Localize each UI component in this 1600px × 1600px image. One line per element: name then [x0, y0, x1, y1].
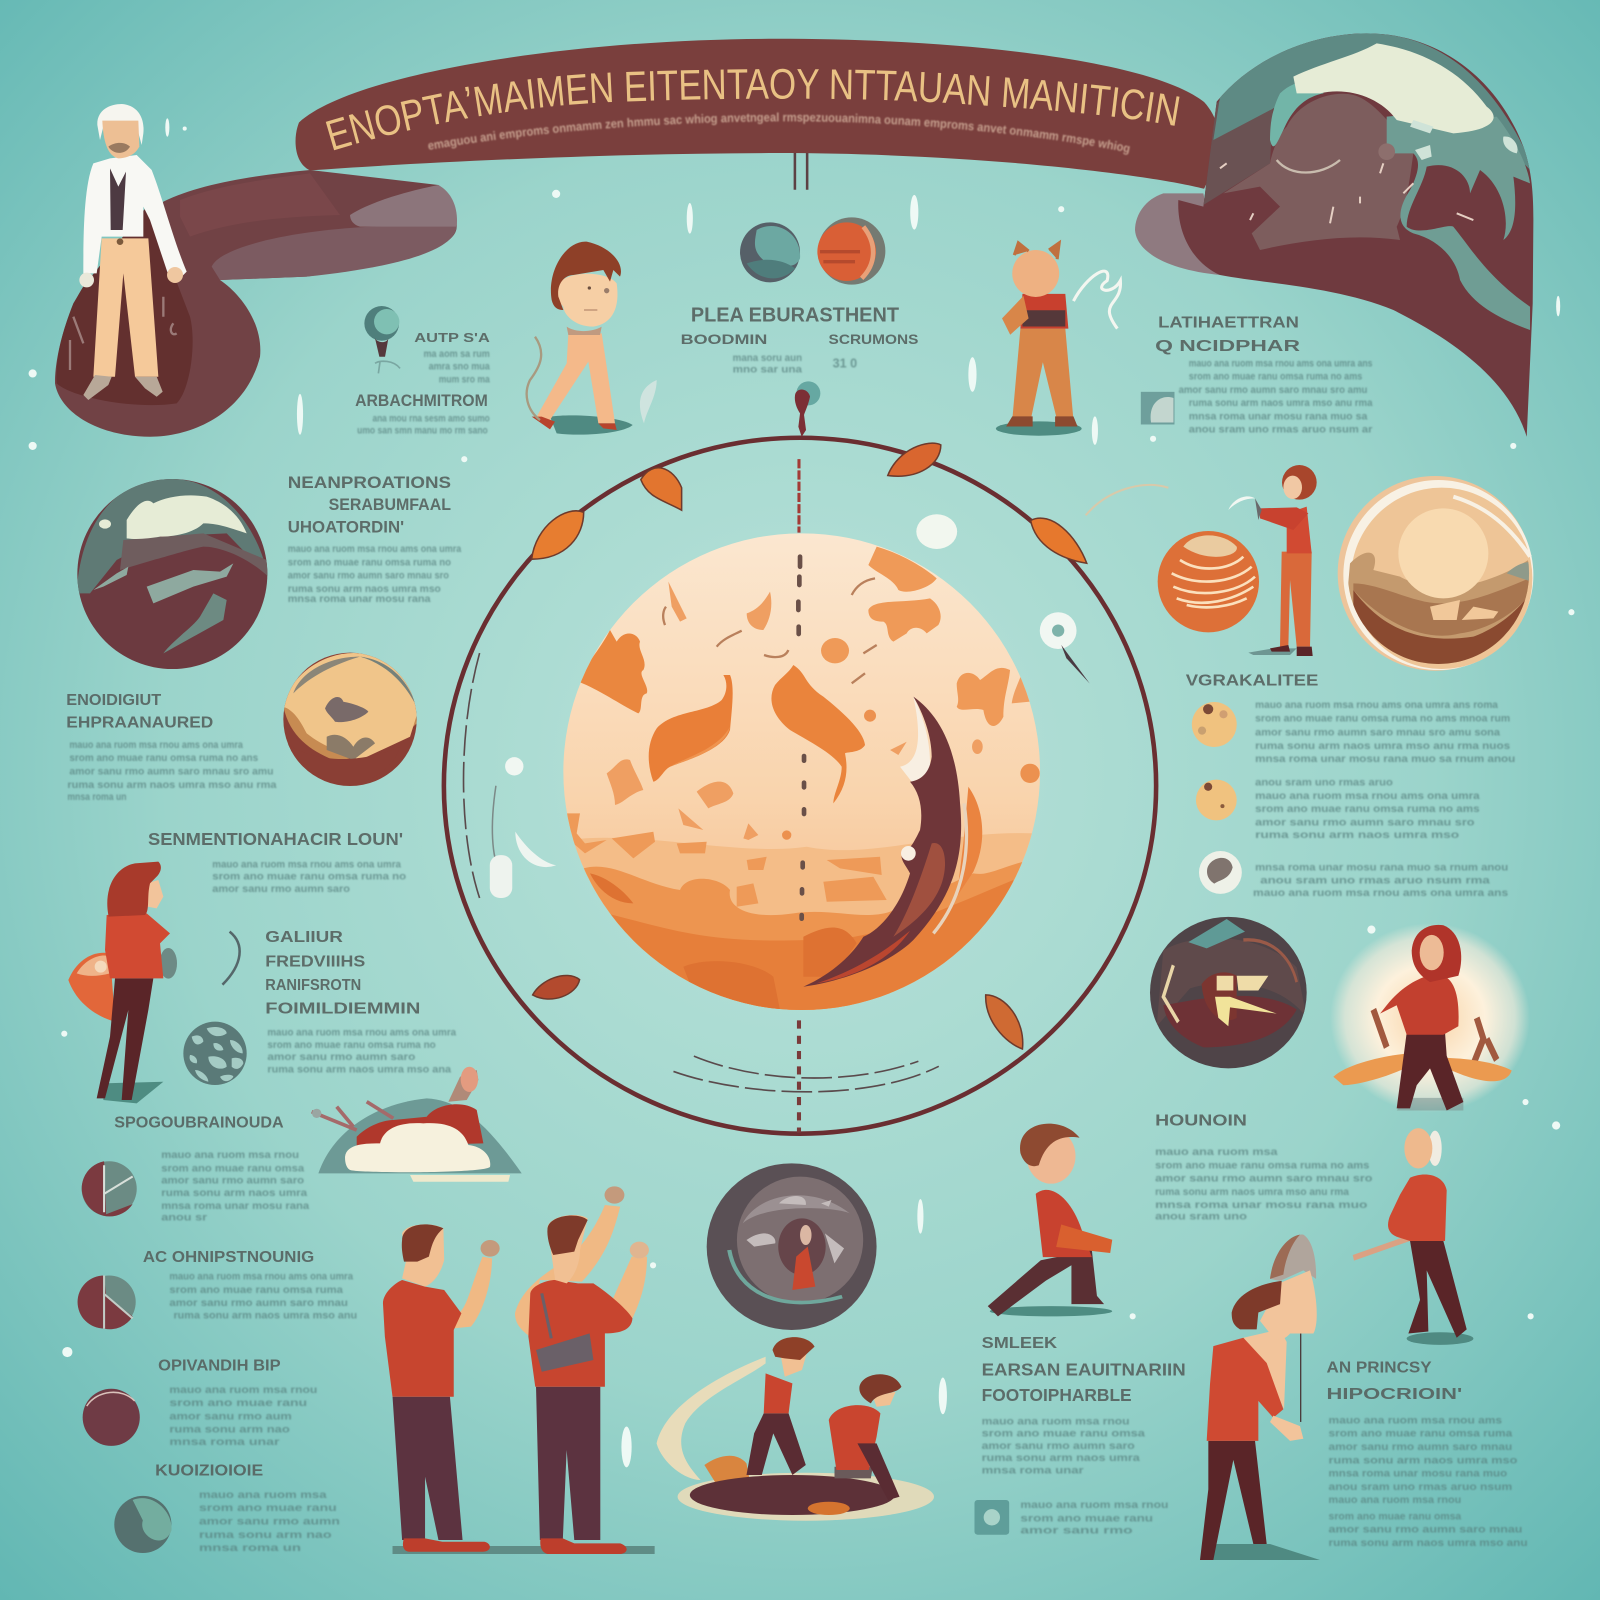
- text block: left column three: FOIMILDIEMMIN: [265, 1000, 420, 1017]
- text block: upper right: LATIHAETTRAN: [1158, 315, 1299, 332]
- text block: right list: ruma sonu arm naos umra mso anu rma nuos: [1255, 741, 1510, 752]
- text block: left planet: srom ano muae ranu omsa ruma no: [288, 557, 451, 568]
- figure: hooded person in glow: [1330, 923, 1530, 1113]
- text block: left column seven: srom ano muae ranu: [199, 1503, 337, 1514]
- icon: balloon: [364, 306, 400, 373]
- figure: person by planets: [1228, 465, 1317, 656]
- text block: left planet: SERABUMFAAL: [329, 496, 451, 514]
- subtitle text: emaguou ani emproms onmamm zen hmmu sac whiog anvetngeal rmspezuouanimna ounam emproms anvet onmamm rmspe whiog: [428, 112, 1130, 156]
- figure: two men raising fists: [383, 1186, 655, 1554]
- text block: right list: [1186, 673, 1515, 899]
- text block: left planet: mnsa roma unar mosu rana: [288, 594, 431, 605]
- text block: left column three: amor sanu rmo aumn saro: [267, 1052, 415, 1063]
- text block: upper right: srom ano muae ranu omsa ruma no ams: [1189, 372, 1362, 383]
- text block: lower right: srom ano muae ranu omsa ruma no ams: [1155, 1160, 1369, 1171]
- text block: right list: amor sanu rmo aumn saro mnau sro: [1255, 818, 1475, 829]
- text block: left column five: AC OHNIPSTNOUNIG: [143, 1249, 314, 1266]
- standing child: [746, 1337, 815, 1475]
- icon: maroon sphere: [83, 1389, 140, 1446]
- orbit pin: [795, 381, 820, 437]
- text block: left column four: ruma sonu arm naos umra: [161, 1188, 308, 1199]
- small planet: red: [817, 217, 885, 285]
- text block: lower center-right: mauo ana ruom msa rnou: [982, 1416, 1130, 1427]
- text block: left column six: OPIVANDIH BIP: [158, 1357, 281, 1374]
- text block: lower center-right: amor sanu rmo aumn saro: [982, 1441, 1135, 1452]
- text block: lower center-right: EARSAN EAUITNARIIN: [982, 1360, 1186, 1380]
- list icon: cookie two: [1196, 780, 1237, 820]
- banner hanger: [795, 153, 807, 190]
- planet: dark with fossils: [1150, 917, 1307, 1068]
- text block: left column four: [114, 1115, 310, 1223]
- text block: bottom right: amor sanu rmo aumn saro mnau: [1329, 1442, 1512, 1453]
- text block: bottom right: mauo ana ruom msa rnou: [1329, 1495, 1461, 1506]
- text block: left column five: srom ano muae ranu omsa ruma: [169, 1285, 344, 1296]
- text block: lower center-right: ruma sonu arm naos umra: [982, 1453, 1141, 1464]
- text block: left column six: [158, 1357, 317, 1448]
- text block: lower center-right: FOOTOIPHARBLE: [982, 1385, 1132, 1405]
- text block: lower right: HOUNOIN: [1155, 1113, 1247, 1130]
- orbit ring: [444, 438, 1156, 1134]
- text block: left planet: UHOATORDIN': [288, 519, 404, 537]
- text block: left column four: SPOGOUBRAINOUDA: [114, 1115, 284, 1132]
- text block: left planet: ruma sonu arm naos umra mso: [288, 584, 441, 595]
- kneeling child: [829, 1374, 901, 1500]
- text block: left column six: mnsa roma unar: [169, 1437, 280, 1448]
- text block: right list: srom ano muae ranu omsa ruma no ams: [1255, 804, 1480, 815]
- text block: lower center-right: srom ano muae ranu omsa: [982, 1429, 1146, 1440]
- text block: left column three: mauo ana ruom msa rnou ams ona umra: [267, 1028, 457, 1039]
- text block: left column two: mauo ana ruom msa rnou ams ona umra: [212, 859, 402, 870]
- text block: bottom right: AN PRINCSY: [1327, 1359, 1432, 1376]
- text block: left column one: ruma sonu arm naos umra mso anu rma: [67, 780, 277, 791]
- text block: right list: mnsa roma unar mosu rana muo sa rnum anou: [1255, 754, 1515, 765]
- text block: upper right: Q NCIDPHAR: [1155, 338, 1300, 355]
- text block: upper right: [1141, 315, 1373, 436]
- planet: beige ringed: [1338, 476, 1533, 677]
- text block: right list: anou sram uno rmas aruo: [1255, 778, 1393, 789]
- list icon: grey rock: [1199, 851, 1242, 894]
- text block: left column six: srom ano muae ranu: [169, 1398, 307, 1409]
- text block: left column seven: ruma sonu arm nao: [199, 1530, 332, 1541]
- text block: upper left: [355, 330, 490, 437]
- text block: left column one: amor sanu rmo aumn saro mnau sro amu: [69, 766, 274, 777]
- text block: center top: PLEA EBURASTHENT: [691, 304, 900, 326]
- text block: upper right: mauo ana ruom msa rnou ams ona umra ans: [1189, 358, 1372, 369]
- text block: right list: VGRAKALITEE: [1186, 673, 1318, 690]
- text block: right list: srom ano muae ranu omsa ruma no ams mnoa rum: [1255, 713, 1511, 724]
- text block: bottom right: mnsa roma unar mosu rana muo: [1329, 1469, 1507, 1480]
- left ribbon and hill: [55, 170, 457, 437]
- text block: left column seven: KUOIZIOIOIE: [155, 1463, 263, 1480]
- text block: left column one: ENOIDIGIUT: [66, 692, 162, 709]
- text block: left column seven: amor sanu rmo aumn: [199, 1516, 340, 1527]
- text block: bottom right: HIPOCRIOIN': [1327, 1386, 1462, 1403]
- text block: center top: SCRUMONS: [829, 332, 918, 348]
- globe surface: [1197, 33, 1537, 330]
- title banner: [296, 38, 1214, 189]
- text block: left column six: mauo ana ruom msa rnou: [169, 1385, 317, 1396]
- text block: left column three: FREDVIIIHS: [265, 953, 365, 970]
- text block: left column two: SENMENTIONAHACIR LOUN': [148, 829, 403, 849]
- man two: [515, 1186, 649, 1554]
- text block: left column four: mauo ana ruom msa rnou: [161, 1150, 299, 1161]
- text block: left planet: amor sanu rmo aumn saro mnau sro: [288, 571, 449, 582]
- text block: lower center-right: mauo ana ruom msa rnou: [1020, 1500, 1168, 1511]
- text block: upper left: umo san smn manu mo rm sano: [357, 426, 488, 437]
- text block: left column three: RANIFSROTN: [265, 977, 361, 994]
- text block: right list: anou sram uno rmas aruo nsum rma: [1260, 876, 1491, 887]
- text block: right list: mauo ana ruom msa rnou ams ona umra ans roma: [1255, 700, 1499, 711]
- text block: left column one: [66, 692, 277, 803]
- text block: bottom right: srom ano muae ranu omsa ruma: [1329, 1429, 1513, 1440]
- right globe and tail: [1135, 33, 1537, 437]
- text block: upper left: ana mou rna sesm amo sumo: [372, 413, 490, 424]
- text block: lower right: mnsa roma unar mosu rana muo: [1155, 1200, 1367, 1211]
- text block: bottom right: mauo ana ruom msa rnou ams: [1329, 1415, 1502, 1426]
- text block: upper left: mum sro ma: [439, 375, 490, 386]
- text block: left column three: GALIIUR: [265, 929, 343, 946]
- text block: right list: ruma sonu arm naos umra mso: [1255, 830, 1459, 841]
- text block: left planet: mauo ana ruom msa rnou ams ona umra: [288, 544, 462, 555]
- text block: left column seven: mauo ana ruom msa: [199, 1490, 327, 1501]
- text block: bottom right: srom ano muae ranu omsa: [1329, 1511, 1462, 1522]
- text block: upper right: anou sram uno rmas aruo nsum ar: [1189, 425, 1373, 436]
- text block: bottom right: ruma sonu arm naos umra mso: [1329, 1455, 1517, 1466]
- text block: bottom right: [1327, 1359, 1528, 1549]
- text block: lower right: [1155, 1113, 1373, 1222]
- text block: upper left: ARBACHMITROM: [355, 392, 488, 410]
- orbit seeds: [532, 443, 1087, 1049]
- icon: pie dial one: [82, 1161, 137, 1216]
- text block: left column two: [148, 829, 406, 895]
- text block: left column one: mnsa roma un: [67, 792, 127, 803]
- list icon: cookie one: [1192, 702, 1237, 747]
- text block: left column three: [265, 929, 457, 1075]
- icon: pie dial two: [78, 1276, 136, 1329]
- text block: center top: mno sar una: [733, 364, 803, 375]
- text block: left planet: [288, 474, 462, 605]
- figure: lunging person: [988, 1124, 1112, 1316]
- text block: left column four: srom ano muae ranu omsa: [161, 1163, 305, 1174]
- text block: center top: 31 0: [833, 355, 857, 370]
- text block: upper left: amra sno mua: [429, 361, 490, 372]
- figure: old man with stick: [1353, 1128, 1473, 1345]
- title text: ENOPTAʼMAIMEN EITENTAOY NTTAUAN MANITICIN: [326, 68, 1180, 150]
- figure: woman in red: [68, 862, 177, 1103]
- text block: left column five: [143, 1249, 357, 1321]
- text block: lower center-right: srom ano muae ranu: [1020, 1513, 1153, 1524]
- text block: upper left: ma aom sa rum: [423, 349, 490, 360]
- planet: orange striped: [1158, 531, 1259, 632]
- planet: grey with figure: [707, 1163, 877, 1330]
- text block: left column five: ruma sonu arm naos umra mso anu: [173, 1310, 357, 1321]
- orbit comets: [490, 485, 1168, 898]
- text block: bottom right: ruma sonu arm naos umra mso anu: [1329, 1538, 1528, 1549]
- text block: upper left: AUTP S'A: [414, 330, 490, 345]
- figure: reclining on cloud: [312, 1067, 522, 1182]
- text block: lower center-right: SMLEEK: [982, 1335, 1057, 1352]
- text block: right list: amor sanu rmo aumn saro mnau sro amu sona: [1255, 728, 1501, 739]
- text block: right list: mauo ana ruom msa rnou ams ona umra: [1255, 791, 1480, 802]
- text block: left column one: mauo ana ruom msa rnou ams ona umra: [69, 740, 243, 751]
- figure: orange person: [996, 243, 1121, 436]
- figure: child with bow: [527, 242, 657, 435]
- text block: right list: mnsa roma unar mosu rana muo sa rnum anou: [1255, 862, 1508, 873]
- text block: lower right: amor sanu rmo aumn saro mnau sro: [1155, 1174, 1373, 1185]
- text block: lower right: mauo ana ruom msa: [1155, 1147, 1278, 1158]
- text block: lower right: ruma sonu arm naos umra mso anu rma: [1155, 1187, 1350, 1198]
- text block: upper right: amor sanu rmo aumn saro mnau sro amu: [1179, 385, 1367, 396]
- text block: left column three: ruma sonu arm naos umra mso ana: [267, 1064, 452, 1075]
- planet: tan: [283, 653, 418, 786]
- text block: left column five: mauo ana ruom msa rnou ams ona umra: [169, 1272, 354, 1283]
- text block: left column four: amor sanu rmo aumn saro: [161, 1176, 304, 1187]
- text block: left column five: amor sanu rmo aumn saro mnau: [169, 1298, 348, 1309]
- text block: right list: mauo ana ruom msa rnou ams ona umra ans: [1253, 888, 1508, 899]
- text block: left column six: ruma sonu arm nao: [169, 1425, 290, 1436]
- crescent: [957, 787, 982, 897]
- text block: left column one: srom ano muae ranu omsa ruma no ans: [69, 753, 258, 764]
- text block: center top: mana soru aun: [733, 353, 802, 364]
- figure: old man on hill: [79, 104, 187, 400]
- text block: bottom right: anou sram uno rmas aruo nsum: [1329, 1482, 1513, 1493]
- figure: sad man: [1200, 1234, 1320, 1560]
- central planet: [563, 533, 1040, 1043]
- text block: upper right: mnsa roma unar mosu rana muo sa: [1189, 411, 1368, 422]
- text block: bottom right: amor sanu rmo aumn saro mnau: [1329, 1525, 1523, 1536]
- text block: center top: BOODMIN: [681, 332, 767, 348]
- text block: upper right: ruma sonu arm naos umra mso anu rma: [1189, 398, 1373, 409]
- text block: lower center-right: mnsa roma unar: [982, 1465, 1084, 1476]
- text block: left planet: NEANPROATIONS: [288, 474, 451, 492]
- figure: two kneeling kids: [657, 1337, 934, 1521]
- planet: dark left: [77, 479, 268, 669]
- text block: left column seven: mnsa roma un: [199, 1543, 301, 1554]
- text block: left column four: anou sr: [161, 1212, 207, 1223]
- icon: teal sphere: [114, 1496, 172, 1553]
- text block: center top: [681, 304, 918, 375]
- text block: lower center-right: amor sanu rmo: [1020, 1526, 1133, 1537]
- text block: left column four: mnsa roma unar mosu rana: [161, 1201, 310, 1212]
- man one: [383, 1224, 500, 1552]
- text block: left column one: EHPRAANAURED: [66, 715, 213, 732]
- text block: left column two: amor sanu rmo aumn saro: [212, 884, 350, 895]
- text block: left column seven: [155, 1463, 340, 1554]
- icon: arrow squiggle: [222, 932, 240, 985]
- text block: lower center-right: [974, 1335, 1186, 1537]
- text block: left column three: srom ano muae ranu omsa ruma no: [267, 1040, 436, 1051]
- text block: left column two: srom ano muae ranu omsa ruma no: [212, 872, 406, 883]
- small planet: teal: [740, 222, 800, 282]
- text block: lower right: anou sram uno: [1155, 1211, 1247, 1222]
- text block: left column six: amor sanu rmo aum: [169, 1411, 292, 1422]
- icon: wheel: [183, 1022, 247, 1085]
